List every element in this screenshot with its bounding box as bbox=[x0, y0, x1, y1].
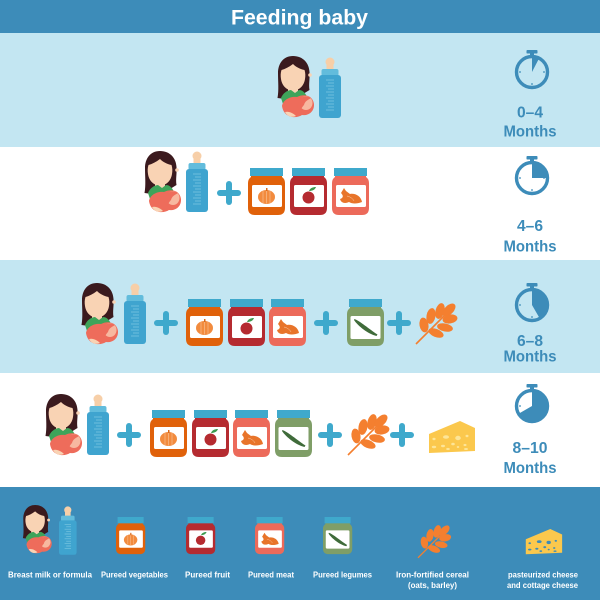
icon: mother and baby bbox=[46, 394, 82, 455]
legend labels bbox=[8, 570, 578, 590]
icon: fruit jar bbox=[192, 410, 229, 457]
icon: stopwatch 4-6 bbox=[516, 156, 548, 194]
icon: wheat bbox=[416, 301, 458, 344]
icon: legume jar bbox=[275, 410, 312, 457]
label: 4-6 months bbox=[504, 218, 556, 256]
label: 8-10 months: 8–10 bbox=[512, 440, 548, 457]
icon: meat jar bbox=[255, 517, 284, 554]
icon: mother and baby bbox=[278, 56, 314, 117]
icon: vegetable jar bbox=[150, 410, 187, 457]
icon: bottle bbox=[87, 394, 109, 455]
label: 8-10 months bbox=[504, 440, 556, 477]
icon: bottle bbox=[186, 152, 208, 212]
label: 6-8 months: 6–8 bbox=[517, 333, 543, 350]
panel: 8-10 months bbox=[0, 373, 600, 487]
icon: plus bbox=[314, 311, 338, 335]
icon: stopwatch 0-4 bbox=[516, 50, 548, 88]
icon: bottle bbox=[124, 284, 146, 344]
icon: wheat bbox=[418, 524, 452, 558]
legend labels: Pureed fruit bbox=[185, 570, 230, 580]
icon: plus bbox=[154, 311, 178, 335]
legend labels: and cottage cheese bbox=[507, 580, 578, 590]
icon: plus bbox=[318, 423, 342, 447]
icon: meat jar bbox=[233, 410, 270, 457]
label: 4-6 months: Months bbox=[504, 238, 556, 256]
legend labels: Pureed meat bbox=[248, 570, 294, 580]
icon: bottle bbox=[59, 506, 77, 555]
icon: wheat bbox=[348, 412, 390, 455]
icon: plus bbox=[390, 423, 414, 447]
legend labels: Breast milk or formula bbox=[8, 570, 92, 580]
panel: 6-8 months bbox=[0, 260, 600, 373]
icon: fruit jar bbox=[290, 168, 327, 215]
label: 6-8 months: Months bbox=[504, 348, 556, 366]
icon: stopwatch 6-8 bbox=[516, 283, 548, 320]
icon: bottle bbox=[319, 58, 341, 118]
label: 6-8 months bbox=[504, 333, 556, 366]
panel: 4-6 months bbox=[0, 147, 600, 260]
title: Feeding baby bbox=[231, 6, 368, 30]
icon: cheese bbox=[526, 529, 562, 554]
label: 8-10 months: Months bbox=[504, 460, 556, 477]
icon: mother and baby bbox=[144, 151, 181, 212]
icon: fruit jar bbox=[228, 299, 265, 346]
icon: meat jar bbox=[269, 299, 306, 346]
label: 0-4 months: 0–4 bbox=[517, 104, 543, 122]
icon: plus bbox=[117, 423, 141, 447]
icon: vegetable jar bbox=[186, 299, 223, 346]
legend labels: Pureed vegetables bbox=[101, 570, 168, 580]
icon: legume jar bbox=[323, 517, 352, 554]
icon: meat jar bbox=[332, 168, 369, 215]
icon: mother and baby bbox=[23, 505, 52, 553]
label: 4-6 months: 4–6 bbox=[517, 218, 543, 235]
panel: 0-4 months bbox=[0, 33, 600, 147]
icon: legume jar bbox=[347, 299, 384, 346]
icon: fruit jar bbox=[186, 517, 215, 554]
icon: vegetable jar bbox=[248, 168, 285, 215]
legend labels: (oats, barley) bbox=[408, 580, 457, 590]
icon: cheese bbox=[429, 421, 475, 453]
icon: plus bbox=[387, 311, 411, 335]
icon: vegetable jar bbox=[116, 517, 145, 554]
icon: plus bbox=[217, 181, 241, 205]
icon: stopwatch 8-10 bbox=[516, 384, 548, 422]
label: 0-4 months bbox=[504, 104, 556, 140]
label: 0-4 months: Months bbox=[504, 124, 556, 140]
legend labels: Iron-fortified cereal bbox=[396, 570, 469, 580]
header bar bbox=[0, 0, 600, 33]
icon: mother and baby bbox=[82, 283, 118, 344]
panel: legend bbox=[0, 487, 600, 600]
legend labels: Pureed legumes bbox=[313, 570, 372, 580]
legend labels: pasteurized cheese bbox=[508, 570, 578, 580]
